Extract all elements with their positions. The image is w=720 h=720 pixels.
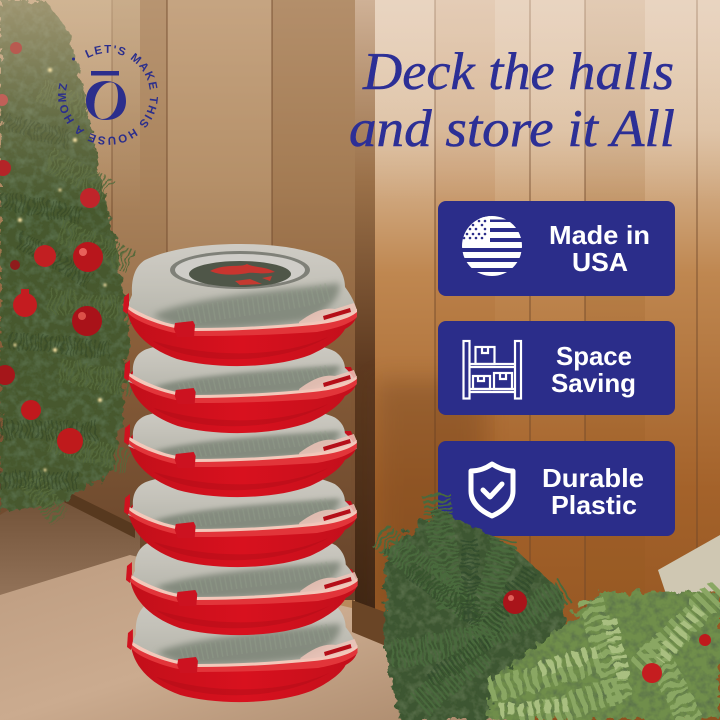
logo dot <box>72 58 75 60</box>
container 4 <box>124 471 357 567</box>
icon: american flag circle <box>460 216 524 276</box>
badge: space saving <box>438 321 675 415</box>
badge: durable plastic <box>438 441 675 536</box>
floor and baseboard <box>0 485 520 720</box>
lid window with bow <box>170 251 310 289</box>
red berries <box>503 590 711 683</box>
label: durable plastic: Plastic <box>551 490 637 520</box>
label: durable plastic <box>542 463 644 520</box>
christmas tree <box>0 0 140 518</box>
logo badge <box>58 45 158 145</box>
badge: made in USA <box>438 201 675 296</box>
stack of wreath containers <box>123 244 358 702</box>
foreground pine greenery <box>380 495 720 720</box>
label: space saving: Space <box>556 341 632 371</box>
container 3 <box>124 405 357 497</box>
logo mark <box>86 71 126 120</box>
label: space saving <box>551 341 636 398</box>
label: made in USA: Made in <box>549 220 650 250</box>
container 6 <box>127 589 357 702</box>
label: durable plastic: Durable <box>542 463 644 493</box>
label: space saving: Saving <box>551 368 636 398</box>
icon: shield with check <box>471 464 513 516</box>
label: made in USA <box>549 220 650 277</box>
icon: storage shelf <box>464 341 521 398</box>
tree branches <box>0 90 138 518</box>
container 1 <box>123 244 357 366</box>
label: made in USA: USA <box>572 247 628 277</box>
light green needles <box>490 590 720 720</box>
birch log <box>658 535 720 600</box>
container 2 <box>124 339 357 433</box>
dark pine branches <box>380 495 570 720</box>
container 5 <box>126 530 358 635</box>
heading <box>349 43 675 158</box>
ornaments <box>0 42 103 454</box>
heading: Deck the halls <box>362 43 674 101</box>
logo ring text: LET'S MAKE THIS HOUSE A HOMZ <box>58 45 158 145</box>
tree top haze <box>0 0 140 210</box>
heading: and store it All <box>349 100 675 158</box>
